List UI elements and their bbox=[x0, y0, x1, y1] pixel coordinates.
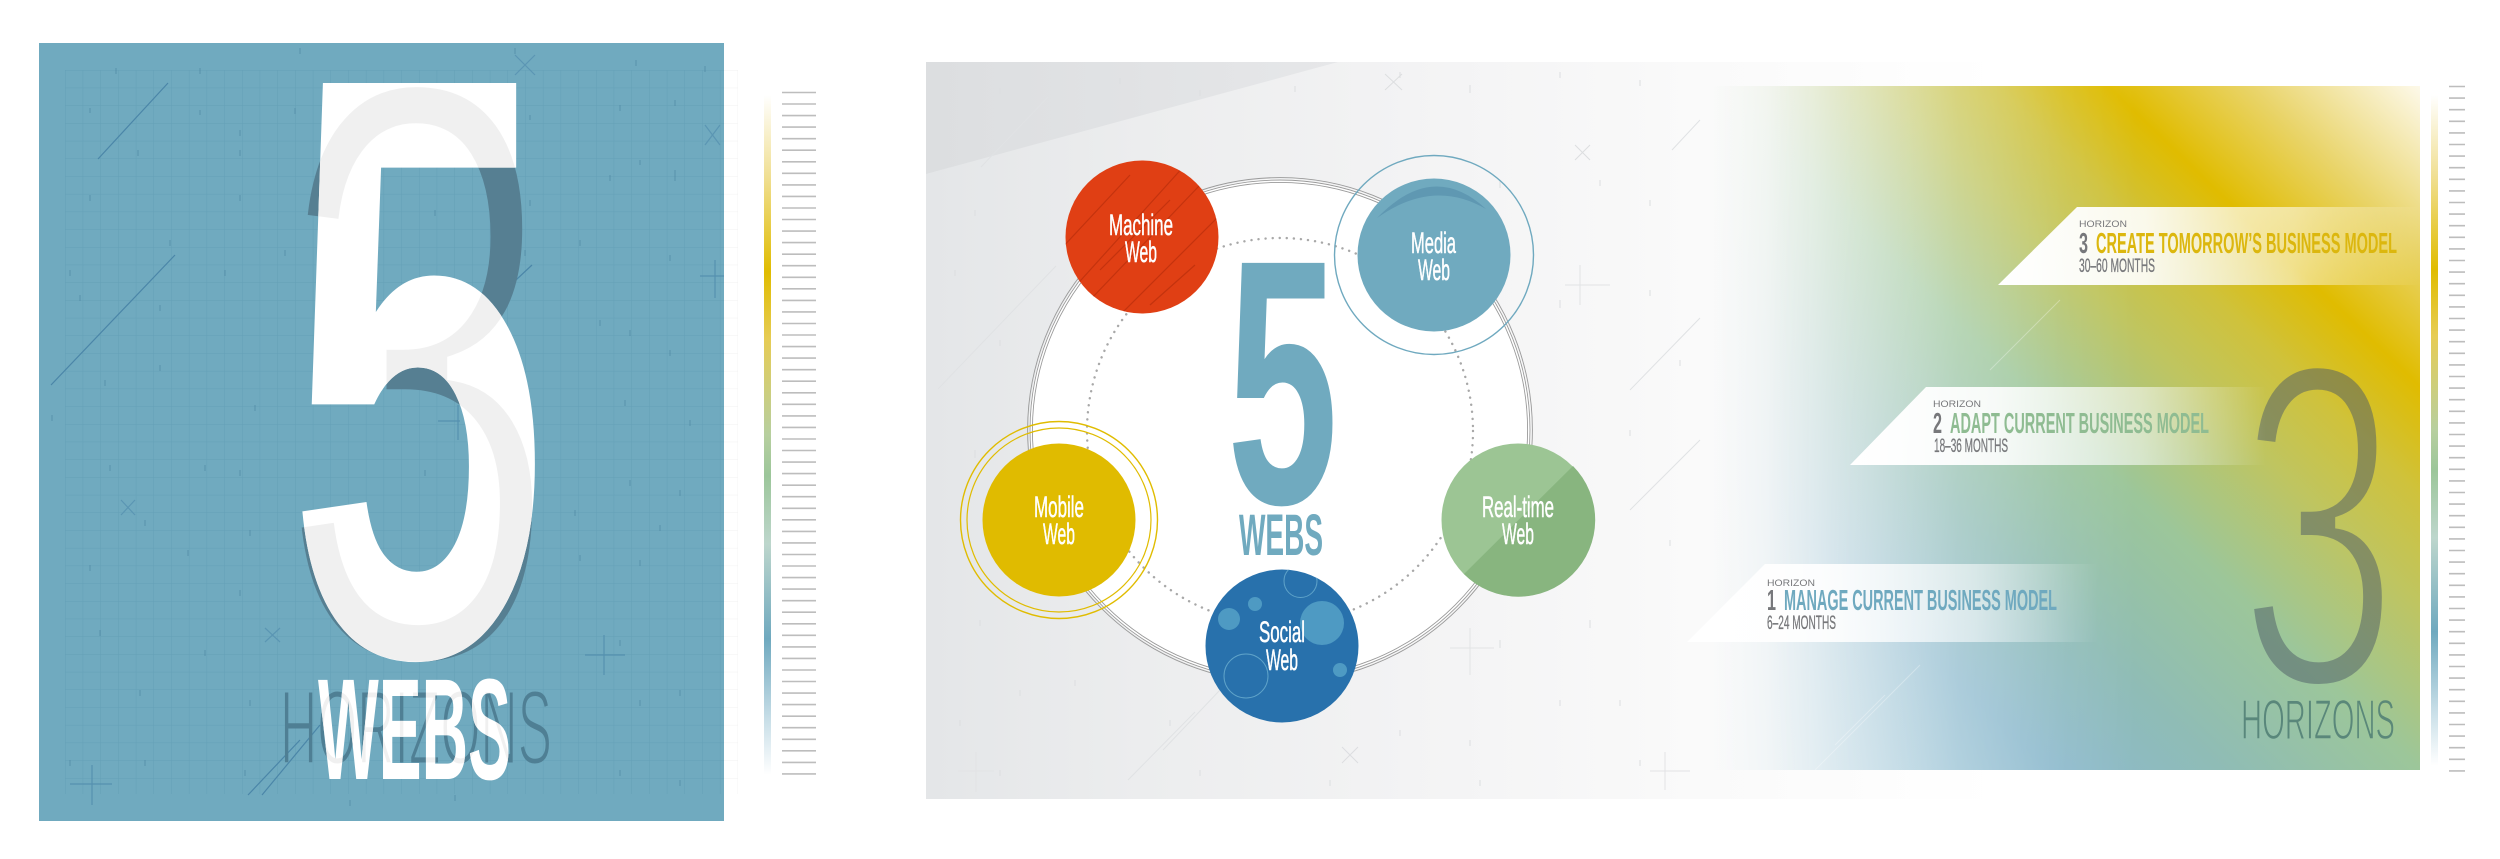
circle: Mobile Web bbox=[960, 422, 1158, 618]
numeral 3: 3 bbox=[2239, 267, 2398, 784]
banner: horizon 1: HORIZON bbox=[1767, 578, 1815, 588]
circle: Real-time Web: Web bbox=[1502, 518, 1534, 551]
banner: horizon 1: 6–24 MONTHS bbox=[1767, 613, 1836, 634]
circle: Social Web bbox=[1206, 564, 1358, 722]
circle: Media Web: Media bbox=[1411, 227, 1456, 260]
banner: horizon 2: ADAPT CURRENT BUSINESS MODEL bbox=[1950, 408, 2209, 440]
circle: Mobile Web: Web bbox=[1043, 518, 1075, 551]
banner: horizon 3: 3 bbox=[2079, 228, 2088, 260]
circle: Mobile Web: Mobile bbox=[1034, 491, 1084, 524]
panel: 5 webs poster bbox=[39, 0, 738, 845]
banner: horizon 2: 2 bbox=[1933, 408, 1942, 440]
colour scale bar right bbox=[2431, 95, 2438, 766]
tick ladder left bbox=[782, 92, 816, 774]
tick ladder right bbox=[2449, 86, 2465, 771]
panel: webs diagram background bbox=[926, 62, 2000, 799]
circle: Real-time Web bbox=[1442, 444, 1595, 597]
circle: Media Web bbox=[1334, 156, 1534, 354]
panel: 5 webs poster: HORIZONS bbox=[280, 669, 552, 787]
banner: horizon 2: 18–36 MONTHS bbox=[1934, 436, 2008, 457]
banner: horizon 2 bbox=[1850, 387, 2266, 465]
banner: horizon 1: 1 bbox=[1767, 585, 1776, 617]
panel: 5 webs poster: WEBS bbox=[318, 649, 511, 810]
banner: horizon 3: 30–60 MONTHS bbox=[2079, 256, 2155, 277]
circle: Machine Web: Machine bbox=[1109, 209, 1173, 242]
circle: Social Web: Social bbox=[1259, 616, 1305, 649]
banner: horizon 3: HORIZON bbox=[2079, 219, 2127, 229]
text: WEBS bbox=[1239, 503, 1323, 568]
banner: horizon 2: HORIZON bbox=[1933, 399, 1981, 409]
circle: Social Web: Web bbox=[1266, 644, 1298, 677]
big ring bbox=[1028, 178, 1532, 682]
panel: horizons gradient bbox=[1710, 86, 2420, 770]
panel: 5 webs poster: HORIZONS bbox=[280, 669, 552, 787]
circle: Media Web: Web bbox=[1418, 254, 1450, 287]
circle: Real-time Web: Real-time bbox=[1482, 491, 1554, 524]
grid texture bbox=[65, 70, 738, 794]
dotted inner ring bbox=[1087, 238, 1473, 624]
banner: horizon 1: MANAGE CURRENT BUSINESS MODEL bbox=[1784, 585, 2057, 617]
numeral 5 centre: 5 bbox=[1227, 189, 1338, 578]
banner: horizon 1 bbox=[1687, 564, 2098, 642]
circle: Machine Web: Web bbox=[1125, 236, 1157, 269]
circle: Machine Web bbox=[1060, 160, 1220, 315]
banner: horizon 3 bbox=[1998, 207, 2420, 285]
colour scale bar left bbox=[764, 95, 771, 775]
